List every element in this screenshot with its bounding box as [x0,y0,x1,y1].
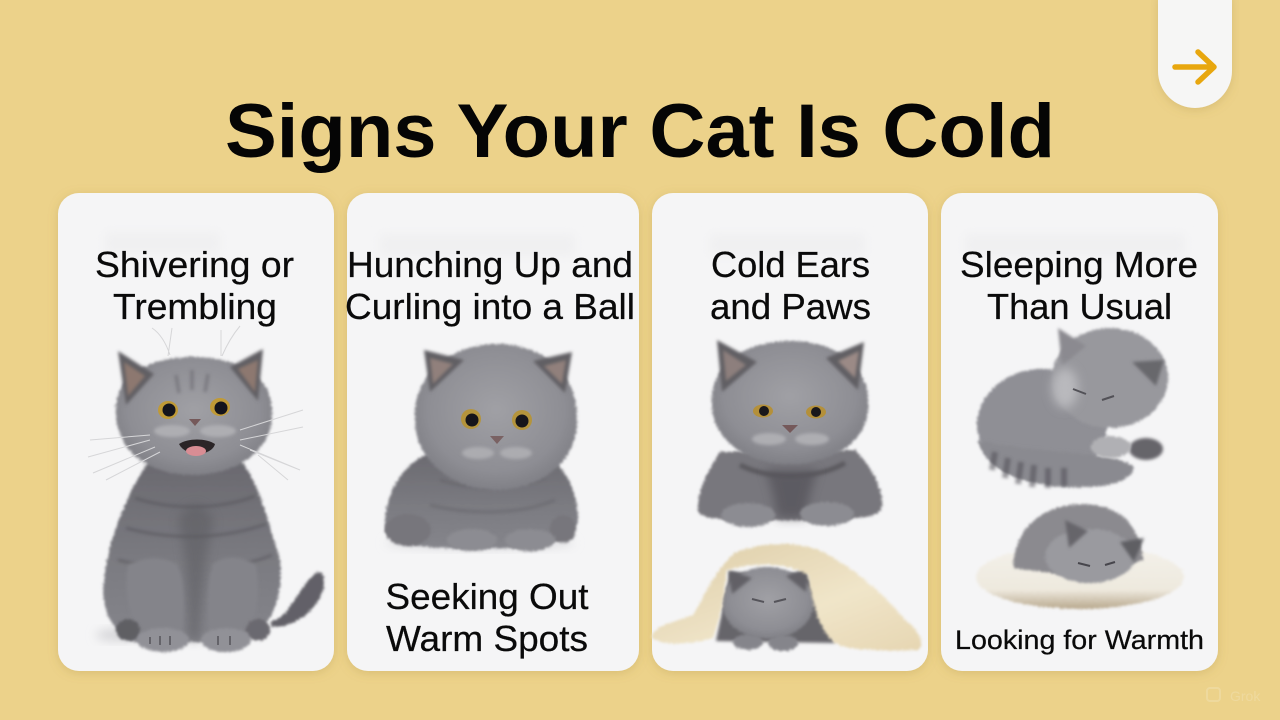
panel: hunching up [345,193,639,671]
illustration: shivering cat [88,326,324,652]
heading: hunching: Curling into a Ball [345,286,635,327]
subheading: looking for warmth: Looking for Warmth [955,625,1204,655]
heading: shivering [95,244,294,327]
illustration: hunched cat [385,344,578,551]
illustration: cat on bed [976,504,1184,609]
arrow tab [1158,0,1232,108]
heading: sleeping: Sleeping More [960,244,1198,285]
subheading: seeking warm spots: Warm Spots [386,618,588,659]
heading: shivering: Trembling [113,286,277,327]
heading: cold ears: Cold Ears [711,244,870,285]
illustration: cold cat [698,340,882,527]
heading: shivering: Shivering or [95,244,294,285]
illustration: cat under blanket [651,544,921,651]
panel: shivering or trembling [58,193,334,671]
title: Signs Your Cat Is Cold [225,89,1055,174]
watermark [1207,688,1261,704]
heading: sleeping [960,244,1198,327]
heading: cold ears [710,244,871,327]
heading: hunching: Hunching Up and [347,244,633,285]
panel: sleeping more than usual [941,193,1218,671]
heading: hunching [345,244,635,327]
panel: cold ears and paws [651,193,928,671]
icon: arrow [1175,52,1214,82]
heading: cold ears: and Paws [710,286,871,327]
illustration: curled sleeping cat [977,328,1168,488]
subheading: seeking warm spots: Seeking Out [386,576,588,617]
heading: sleeping: Than Usual [987,286,1172,327]
subheading: seeking warm spots [386,576,588,659]
watermark: Grok [1230,688,1261,704]
